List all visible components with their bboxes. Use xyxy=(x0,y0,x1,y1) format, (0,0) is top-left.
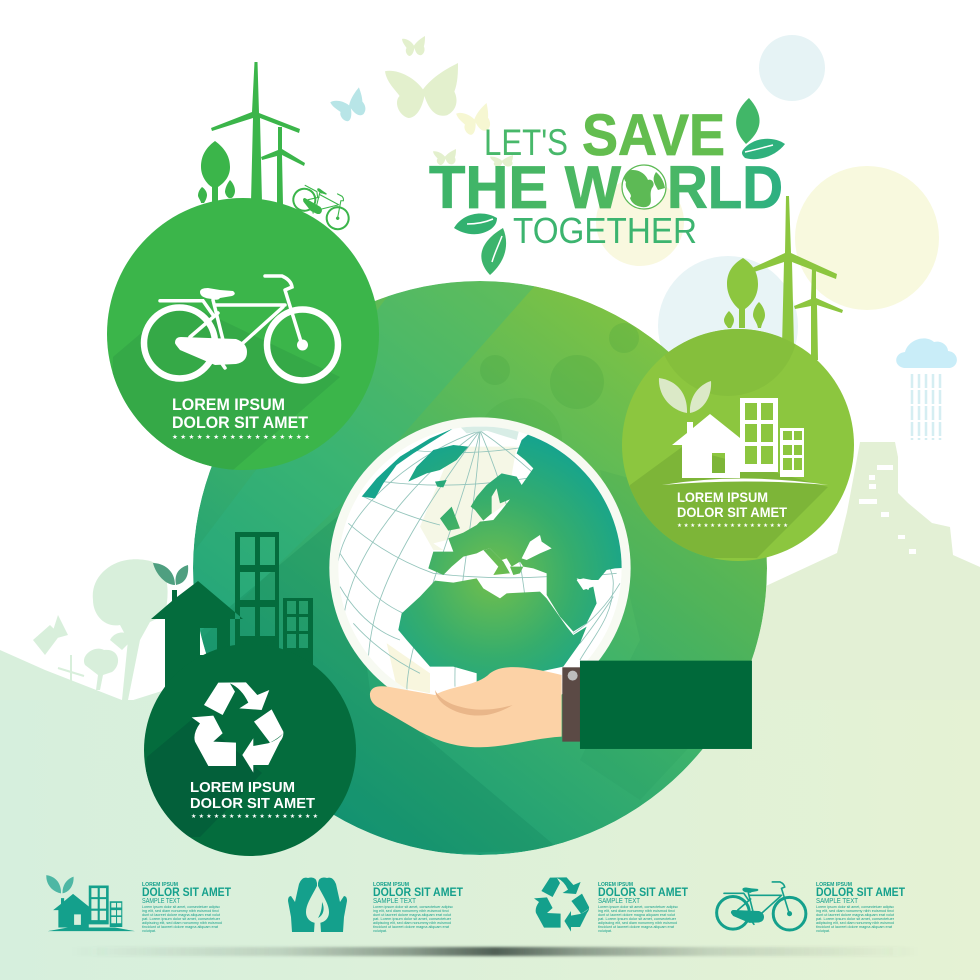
title xyxy=(429,103,783,251)
text block 1: volutpat. xyxy=(142,929,156,933)
label: home circle xyxy=(677,489,788,529)
label: recycle circle: LOREM IPSUM xyxy=(190,779,295,796)
background: right city skyline xyxy=(700,442,980,860)
icon: leaves xyxy=(659,378,711,413)
panel: bicycle scenery xyxy=(198,62,305,205)
icon: title leaves top xyxy=(736,98,785,159)
text block 2: adipiscing elit, sed diam nonummy nibh euismod xyxy=(373,921,451,925)
panel: home circle xyxy=(622,329,854,561)
text block 1: SAMPLE TEXT xyxy=(142,898,181,905)
text block 1: pat. Lorem ipsum dolor sit amet, consectetuer xyxy=(142,917,221,921)
background: butterflies xyxy=(329,36,513,167)
icon: small bicycle on the hill xyxy=(289,176,357,233)
label: recycle circle xyxy=(190,779,318,820)
icon: hands with water drop xyxy=(288,878,347,932)
text block 2: LOREM IPSUM xyxy=(373,882,409,888)
text block 4: adipiscing elit, sed diam nonummy nibh euismod xyxy=(816,921,894,925)
panel: main green circle xyxy=(180,280,780,860)
icon: bottom recycle xyxy=(534,877,589,932)
Eurasia xyxy=(428,434,622,632)
text block 3: pat. Lorem ipsum dolor sit amet, consectetuer xyxy=(598,917,677,921)
label: bicycle circle: LOREM IPSUM xyxy=(172,395,285,414)
icon: bottom bicycle xyxy=(717,882,806,930)
text block 3: Lorem ipsum dolor sit amet, consectetuer adipisc xyxy=(598,905,678,909)
label: home circle: DOLOR SIT AMET xyxy=(677,504,787,520)
icon: house and buildings xyxy=(662,398,828,485)
text block 2: tincidunt ut laoreet dolore magna aliquam erat xyxy=(373,925,449,929)
icon: bicycle xyxy=(144,276,338,380)
text block 1: adipiscing elit, sed diam nonummy nibh euismod xyxy=(142,921,222,925)
label: bicycle circle: ★★★★★★★★★★★★★★★★★ xyxy=(172,433,310,441)
text block 4: DOLOR SIT AMET xyxy=(816,887,905,899)
text block 1: ing elit, sed diam nonummy nibh euismod tinci xyxy=(142,909,219,913)
text block 3: SAMPLE TEXT xyxy=(598,898,641,905)
label: home circle: LOREM IPSUM xyxy=(677,489,768,505)
title: SAVE xyxy=(582,103,725,168)
text block 2: Lorem ipsum dolor sit amet, consectetuer adipisc xyxy=(373,905,453,909)
icon: globe in title xyxy=(622,165,666,209)
text block 2: ing elit, sed diam nonummy nibh euismod tinci xyxy=(373,909,449,913)
text block 4: LOREM IPSUM xyxy=(816,882,852,888)
text block 1: Lorem ipsum dolor sit amet, consectetuer adipisc xyxy=(142,905,220,909)
label: home circle: ★★★★★★★★★★★★★★★★★ xyxy=(677,523,788,529)
Italy and Balkans xyxy=(483,548,523,575)
text block 1: tincidunt ut laoreet dolore magna aliquam erat xyxy=(142,925,218,929)
text block 3: adipiscing elit, sed diam nonummy nibh euismod xyxy=(598,921,677,925)
text block 4: volutpat. xyxy=(816,929,830,933)
text block 4: Lorem ipsum dolor sit amet, consectetuer adipisc xyxy=(816,905,894,909)
text block 2: volutpat. xyxy=(373,929,387,933)
text block 3: dunt ut laoreet dolore magna aliquam erat volut xyxy=(598,913,675,917)
icon: globe xyxy=(329,417,631,695)
icon: rain cloud xyxy=(896,338,957,440)
panel: bicycle circle xyxy=(107,176,379,470)
label: recycle circle: DOLOR SIT AMET xyxy=(190,795,315,812)
icon: title leaves bottom xyxy=(454,213,506,275)
background: ground band xyxy=(0,700,980,980)
text block 3 xyxy=(598,882,688,933)
text block 1: LOREM IPSUM xyxy=(142,882,178,888)
text block 2 xyxy=(373,882,463,933)
text block 1 xyxy=(142,882,231,933)
text block 2: SAMPLE TEXT xyxy=(373,898,417,905)
background: pale sky circles xyxy=(596,35,939,396)
text block 4: SAMPLE TEXT xyxy=(816,898,859,905)
icon: bottom town xyxy=(46,875,135,931)
title: RLD xyxy=(667,154,783,221)
text block 4: pat. Lorem ipsum dolor sit amet, consectetuer xyxy=(816,917,895,921)
long shadow bands xyxy=(180,280,540,640)
text block 3: ing elit, sed diam nonummy nibh euismod tinci xyxy=(598,909,675,913)
shadow bar at bottom xyxy=(70,947,920,956)
text block 4: tincidunt ut laoreet dolore magna aliquam erat xyxy=(816,925,892,929)
icon: recycle xyxy=(192,682,283,773)
text block 3: tincidunt ut laoreet dolore magna aliquam erat xyxy=(598,925,674,929)
text block 2: pat. Lorem ipsum dolor sit amet, consectetuer xyxy=(373,917,452,921)
title: TOGETHER xyxy=(513,210,697,251)
Africa xyxy=(398,578,587,685)
label: recycle circle: ★★★★★★★★★★★★★★★★★ xyxy=(191,813,318,820)
background: left hills with trees xyxy=(0,559,300,980)
Greenland and north lands xyxy=(362,428,468,531)
panel: dark recycle scenery xyxy=(151,532,313,690)
label: bicycle circle: DOLOR SIT AMET xyxy=(172,413,309,432)
label: bicycle circle xyxy=(172,395,310,441)
text block 4: dunt ut laoreet dolore magna aliquam erat volut xyxy=(816,913,894,917)
text block 4 xyxy=(816,882,905,933)
seas xyxy=(522,535,592,590)
text block 3: LOREM IPSUM xyxy=(598,882,633,888)
text block 3: DOLOR SIT AMET xyxy=(598,887,688,899)
text block 1: DOLOR SIT AMET xyxy=(142,887,231,899)
text block 2: dunt ut laoreet dolore magna aliquam erat volut xyxy=(373,913,451,917)
title: THE W xyxy=(429,154,621,221)
text block 2: DOLOR SIT AMET xyxy=(373,887,463,899)
panel: right circle scenery xyxy=(724,196,843,360)
title: LET'S xyxy=(484,122,568,163)
text block 3: volutpat. xyxy=(598,929,612,933)
text block 1: dunt ut laoreet dolore magna aliquam erat volut xyxy=(142,913,220,917)
icon: hand holding globe xyxy=(370,661,752,749)
text block 4: ing elit, sed diam nonummy nibh euismod tinci xyxy=(816,909,894,913)
panel: recycle circle xyxy=(140,644,356,856)
